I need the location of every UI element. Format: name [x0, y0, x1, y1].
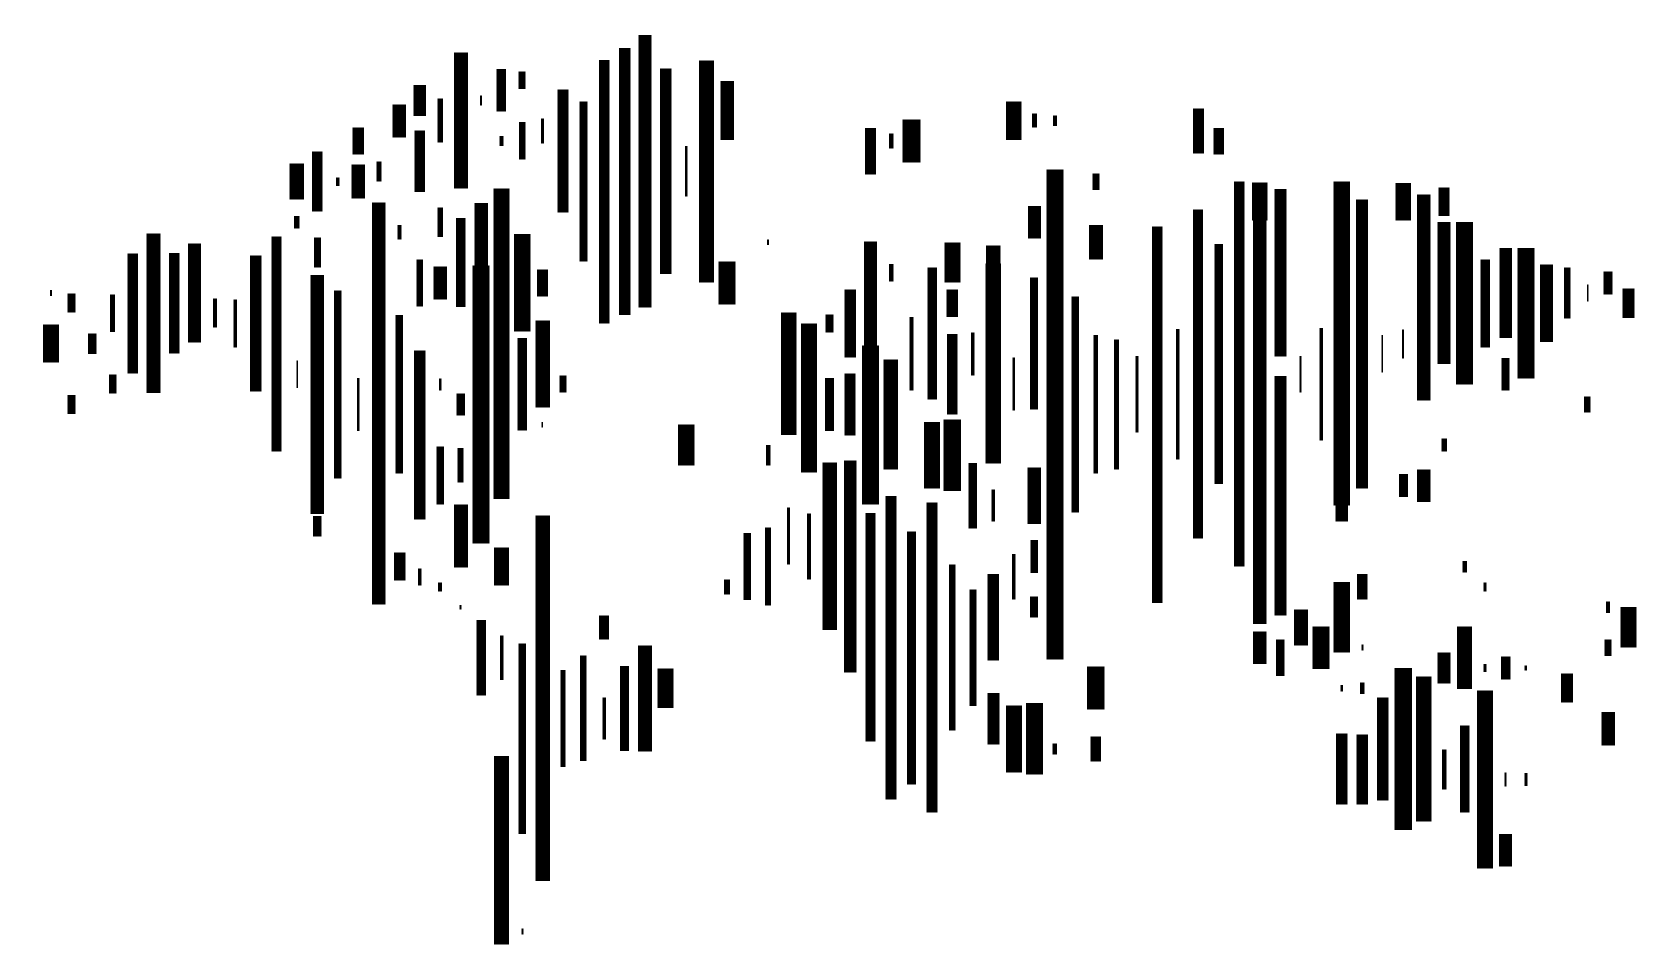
region: South America bars — [476, 515, 673, 944]
region: North America and Greenland bars — [43, 35, 736, 609]
region: Asia bars — [1136, 108, 1634, 689]
region: Europe and Africa bars — [678, 101, 1119, 813]
region: Australia and Oceania bars — [1336, 602, 1637, 868]
